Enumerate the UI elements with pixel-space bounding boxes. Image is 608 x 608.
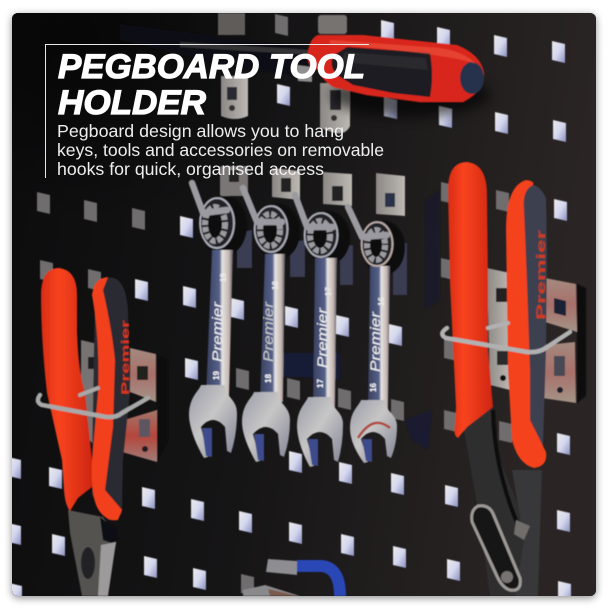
wrench 17	[295, 195, 350, 467]
left pliers handles: Premier	[120, 319, 132, 395]
description text: hooks for quick, organised access	[57, 159, 324, 179]
wrench 19	[189, 183, 247, 458]
left wire clip	[38, 388, 148, 417]
title: PEGBOARD TOOL	[58, 48, 365, 86]
wrench 18: 18	[271, 281, 280, 290]
right pliers lower jaw	[463, 408, 542, 596]
wrench 17: 17	[316, 379, 325, 388]
wrench 17: 17	[324, 287, 333, 296]
wrench hanger plates	[220, 166, 407, 295]
wrench 19: 19	[212, 371, 221, 380]
wrench 16: 16	[377, 297, 386, 306]
wrench 16: 16	[369, 383, 378, 392]
right wire clip	[442, 323, 570, 352]
wrench 17: Premier	[314, 306, 330, 368]
right pliers handles	[448, 162, 548, 468]
title: HOLDER	[58, 84, 206, 122]
screwdriver shaft	[120, 24, 310, 78]
wrench 18: 18	[264, 374, 273, 383]
hex key	[243, 559, 340, 596]
wrench 18	[242, 188, 300, 462]
right pliers handles: Premier	[534, 229, 548, 320]
left hanger plates	[81, 340, 168, 462]
title frame lines	[46, 44, 369, 178]
upper hanger plates	[218, 13, 350, 133]
right hanger plates	[487, 268, 586, 403]
dark blue reflections on board	[283, 190, 440, 450]
wrench 19: Premier	[209, 300, 225, 362]
screwdriver handle	[308, 35, 490, 117]
wrench 18: Premier	[260, 300, 276, 362]
description text: Pegboard design allows you to hang	[57, 121, 344, 141]
description text	[57, 121, 384, 179]
title	[58, 48, 365, 122]
wrench 16: Premier	[367, 310, 383, 372]
left pliers head	[68, 510, 117, 596]
description text: keys, tools and accessories on removable	[57, 140, 384, 160]
wrench 16	[348, 207, 405, 463]
wrench 19: 19	[219, 273, 228, 282]
left pliers handles	[41, 268, 132, 520]
